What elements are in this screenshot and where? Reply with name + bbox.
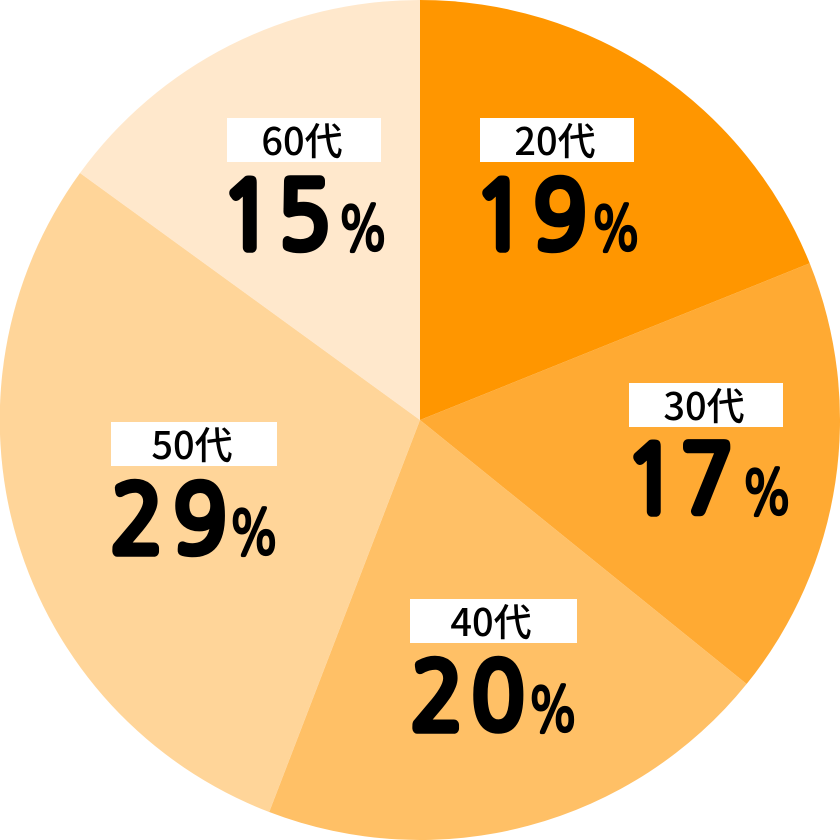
label: 50s 29%: 29 [111, 473, 226, 565]
label: 30s 17%: % [741, 464, 793, 523]
label: 60s 15%: 60代 [261, 111, 343, 166]
slice: 50s 29% [0, 173, 420, 812]
label: 60s 15%: % [337, 200, 389, 259]
label: 20s 19%: 20代 [514, 111, 596, 166]
label: 40s 20%: 40代 [450, 592, 532, 647]
label: 30s 17%: 30代 [663, 376, 745, 431]
label: 40s 20%: % [527, 681, 579, 740]
label: 30s 17% [625, 376, 793, 525]
label: 50s 29%: % [228, 504, 280, 563]
label: 30s 17%: 17 [625, 433, 733, 525]
slice: 30s 17% [420, 263, 840, 684]
label: 20s 19%: % [590, 200, 642, 259]
label: 60s 15% [221, 111, 389, 261]
label: 60s 15%: 15 [221, 169, 330, 261]
slice: 40s 20% [269, 420, 747, 840]
label: 40s 20%: 20 [411, 650, 524, 742]
slice: 60s 15% [80, 0, 420, 420]
label: 20s 19%: 19 [474, 169, 586, 261]
label: 20s 19% [474, 111, 642, 261]
label: 50s 29% [111, 415, 280, 565]
label: 40s 20% [410, 592, 579, 742]
slice: 20s 19% [420, 0, 810, 420]
label: 50s 29%: 50代 [151, 415, 233, 470]
